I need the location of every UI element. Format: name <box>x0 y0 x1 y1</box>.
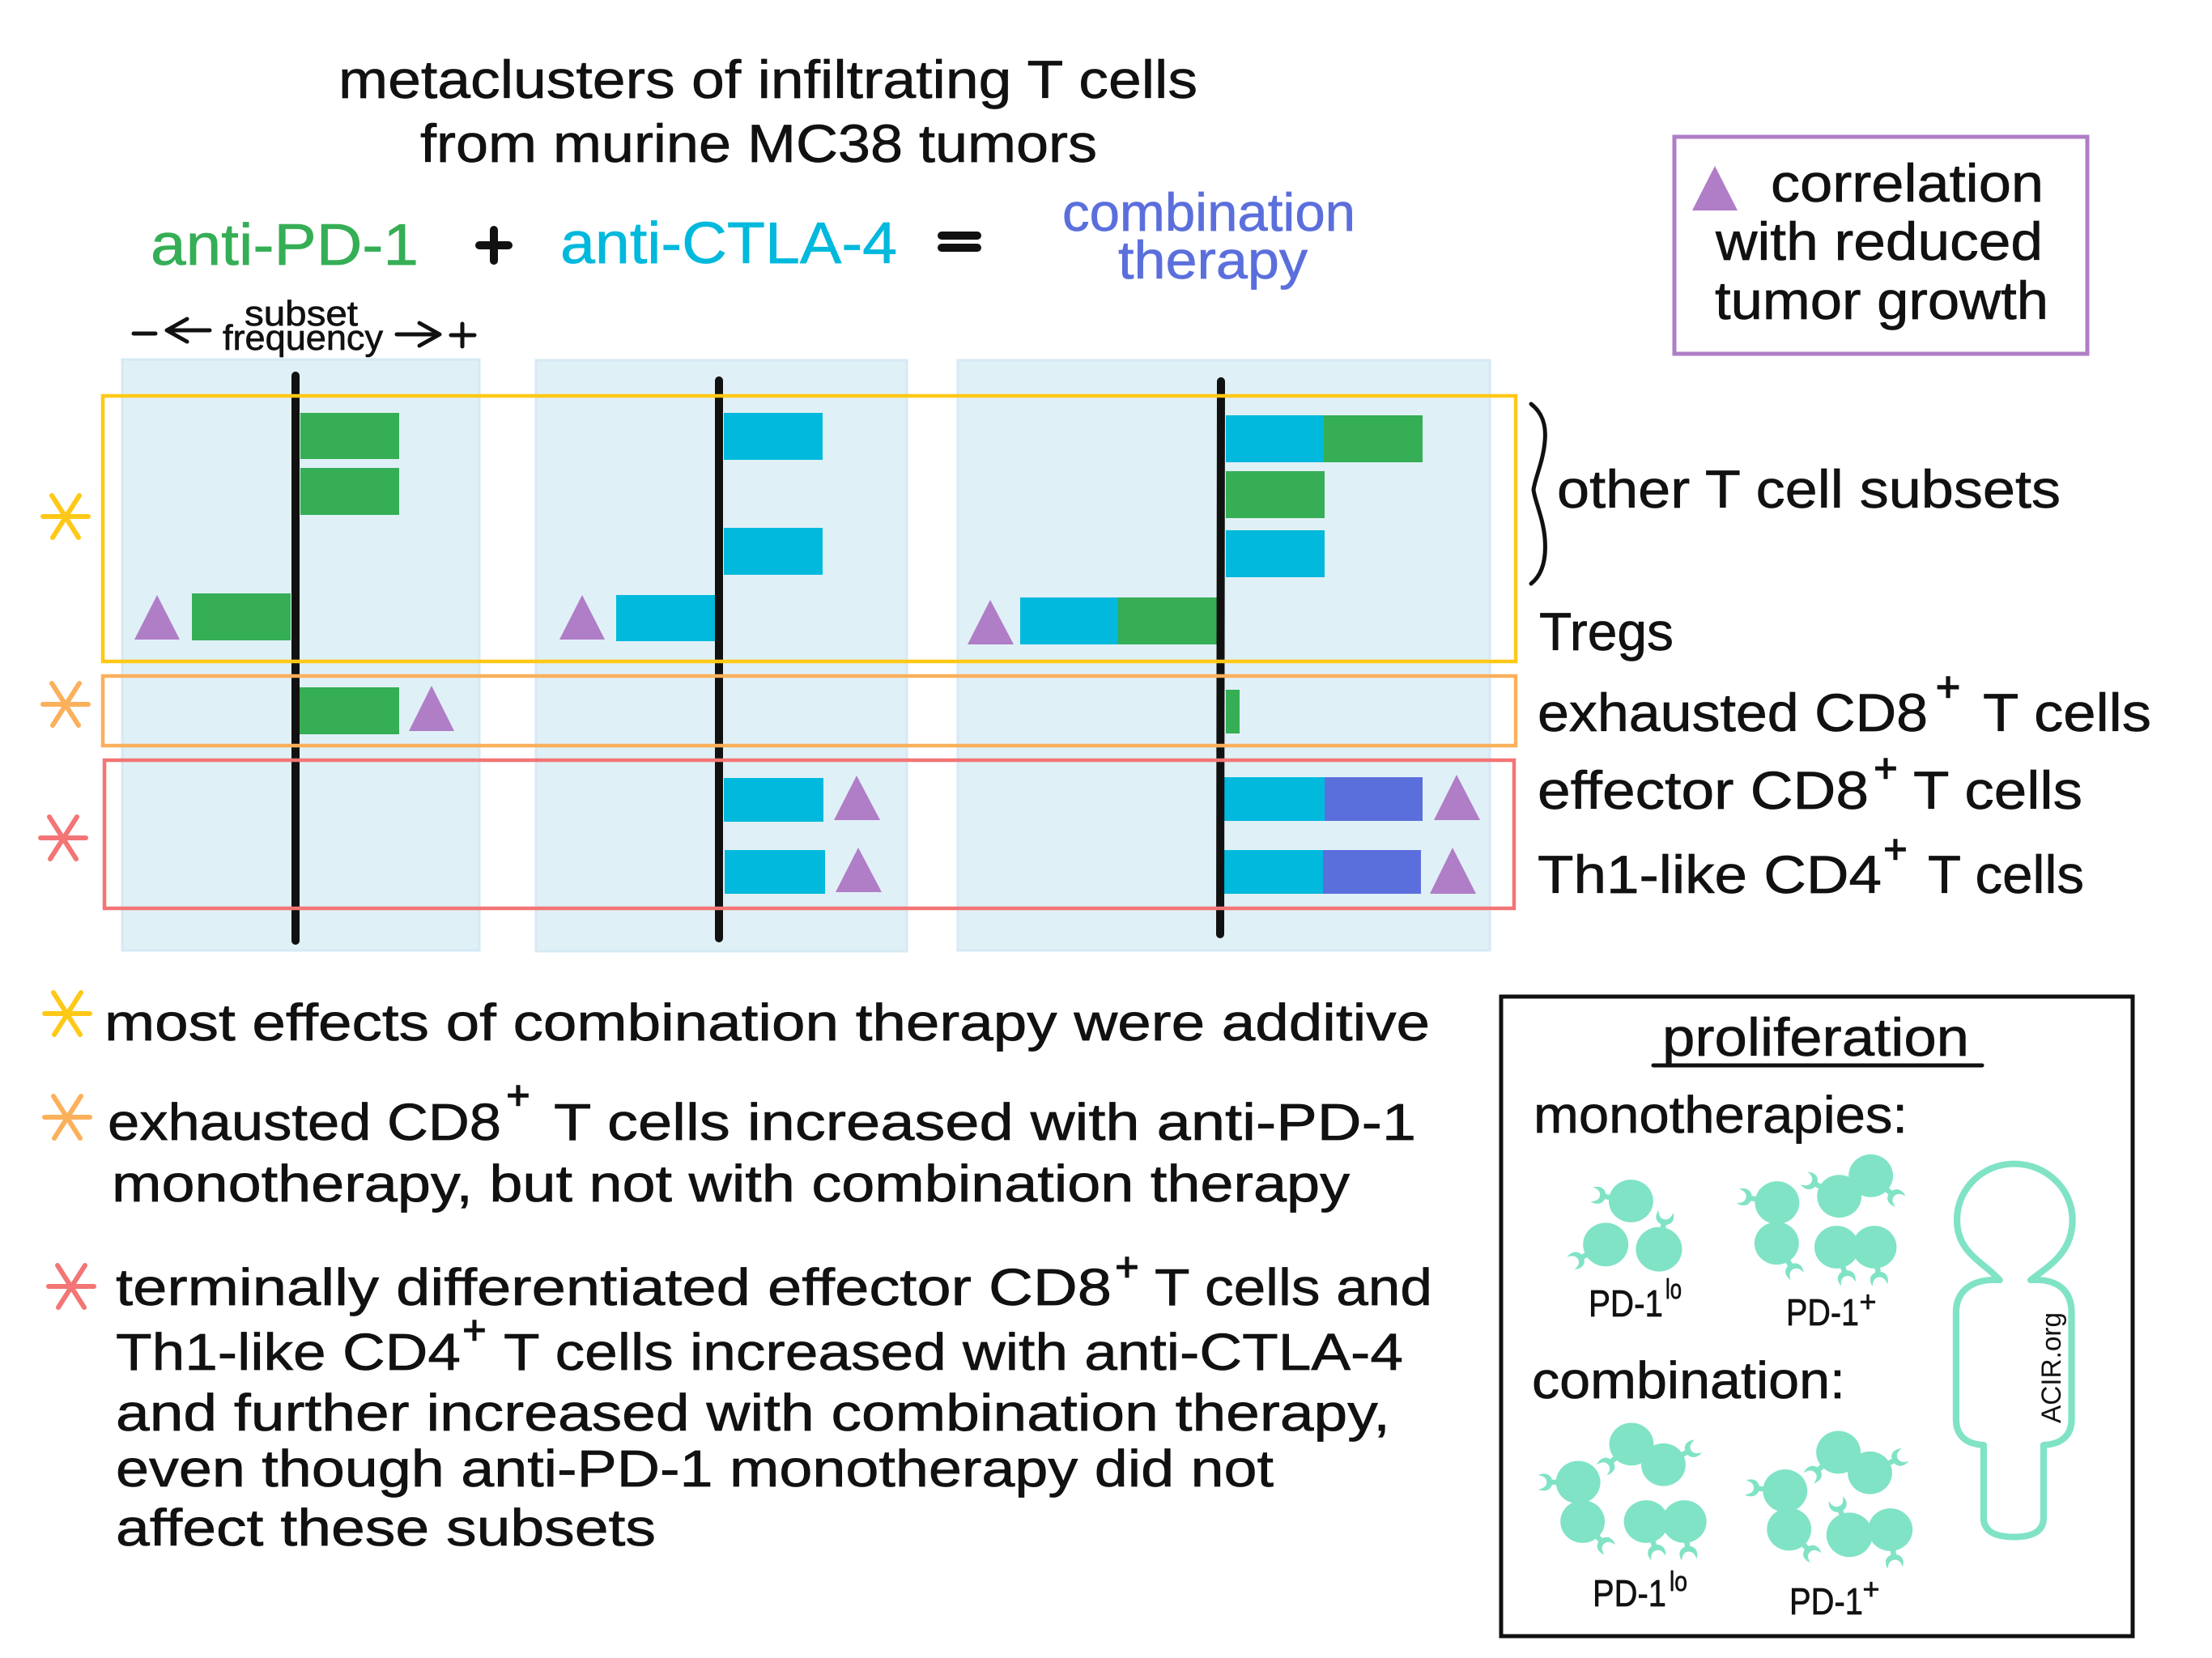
note: orange: T cells increased with anti-PD-1 <box>554 1093 1416 1151</box>
label: effector CD8+ T cells <box>1538 746 2082 820</box>
note: orange: exhausted CD8 <box>108 1093 501 1151</box>
title: metaclusters of infiltrating T cells <box>338 49 1197 109</box>
icon: legend triangle <box>1692 166 1738 210</box>
triangles: correlation markers <box>134 595 1480 894</box>
legend box <box>1674 137 2087 354</box>
note: red: T cells and <box>1155 1258 1432 1316</box>
label: effector CD8+ T cells: effector CD8 <box>1538 760 1869 820</box>
bars: anti-PD-1 <box>192 413 399 734</box>
heading: proliferation: proliferation <box>1662 1007 1969 1067</box>
note: red: affect these subsets <box>116 1499 656 1557</box>
label: monotherapy PD-1 lo: lo <box>1665 1274 1682 1305</box>
panel: proliferation <box>1501 997 2133 1636</box>
text: ACIR.org credit: ACIR.org <box>2036 1312 2067 1423</box>
note: red: even though anti-PD-1 monotherapy did not <box>116 1439 1274 1498</box>
axis lines <box>296 376 1221 941</box>
label: Tregs: Tregs <box>1539 602 1674 661</box>
panel: anti-CTLA-4 <box>536 360 907 951</box>
note: orange: monotherapy, but not with combination therapy <box>112 1154 1350 1213</box>
label: combination PD-1 lo: PD-1 <box>1593 1572 1666 1614</box>
combination therapy label: combination <box>1062 182 1355 242</box>
combination therapy label <box>1062 182 1355 290</box>
note: red: Th1-like CD4 <box>116 1323 461 1381</box>
equation: therapies <box>151 182 1355 290</box>
axis label: subset frequency: subset <box>245 294 358 334</box>
label: exhausted CD8+ T cells: T cells <box>1983 682 2151 742</box>
notes <box>45 993 1432 1557</box>
label: Th1-like CD4+ T cells <box>1538 827 2084 904</box>
bars: combination therapy <box>1020 415 1423 894</box>
note: red: T cells increased with anti-CTLA-4 <box>504 1323 1403 1381</box>
label: monotherapy PD-1 lo: PD-1 <box>1589 1282 1663 1324</box>
label: Th1-like CD4+ T cells: Th1-like CD4 <box>1538 844 1882 904</box>
note: red: + <box>1115 1244 1139 1290</box>
label: combination PD-1 +: PD-1 <box>1789 1580 1863 1622</box>
label: Th1-like CD4+ T cells: T cells <box>1928 844 2084 904</box>
icon: mouse body outline <box>1956 1164 2073 1537</box>
legend text: tumor growth <box>1715 270 2048 330</box>
label: monotherapy PD-1 +: + <box>1859 1285 1877 1318</box>
brace <box>1531 404 1545 584</box>
row labels <box>1538 459 2151 904</box>
label: effector CD8+ T cells: T cells <box>1913 760 2082 820</box>
cells: combination PD-1 lo <box>1538 1423 1707 1561</box>
plus sign <box>479 230 508 261</box>
note: yellow: most effects of combination therapy were additive <box>104 993 1430 1052</box>
anti-CTLA-4 label: anti-CTLA-4 <box>560 211 897 276</box>
label: combination PD-1 +: + <box>1862 1572 1880 1605</box>
heading: monotherapies: monotherapies: <box>1534 1086 1908 1144</box>
note: orange <box>45 1073 1416 1213</box>
panel: anti-PD-1 <box>122 359 479 950</box>
label: Th1-like CD4+ T cells: + <box>1883 827 1908 872</box>
box: orange group <box>103 676 1516 746</box>
asterisk: yellow <box>43 495 88 538</box>
cells: combination PD-1 positive <box>1745 1431 1912 1569</box>
title: from murine MC38 tumors <box>420 113 1097 173</box>
asterisk: red <box>40 817 86 859</box>
note: red: and further increased with combination therapy, <box>116 1384 1390 1442</box>
combination therapy label: therapy <box>1118 230 1308 290</box>
cells: monotherapy PD-1 positive <box>1736 1154 1907 1286</box>
label: other T cell subsets: other T cell subsets <box>1557 459 2061 519</box>
asterisk: orange <box>43 683 88 725</box>
note: red <box>49 1244 1432 1557</box>
note: red: + <box>462 1307 487 1353</box>
axis label: subset frequency: frequency <box>223 318 383 358</box>
label: exhausted CD8+ T cells <box>1538 664 2151 742</box>
panel: combination therapy <box>958 360 1490 950</box>
bars: anti-CTLA-4 <box>616 413 825 894</box>
box: yellow group <box>103 396 1516 661</box>
note: red: terminally differentiated effector CD8 <box>116 1258 1112 1316</box>
heading: combination: combination: <box>1532 1351 1845 1409</box>
label: monotherapy PD-1 +: PD-1 <box>1786 1291 1859 1333</box>
legend text: with reduced <box>1715 211 2043 271</box>
anti-PD-1 label: anti-PD-1 <box>151 213 419 278</box>
box: red group <box>104 760 1514 908</box>
legend text: correlation <box>1771 153 2044 213</box>
label: exhausted CD8+ T cells: + <box>1936 664 1960 711</box>
title <box>338 49 1197 173</box>
cells: monotherapy PD-1 lo <box>1567 1180 1682 1272</box>
equals sign <box>942 236 977 248</box>
label: combination PD-1 lo: lo <box>1670 1567 1687 1597</box>
legend text <box>1715 153 2048 330</box>
label: exhausted CD8+ T cells: exhausted CD8 <box>1538 682 1928 742</box>
label: effector CD8+ T cells: + <box>1874 746 1898 791</box>
note: orange: + <box>506 1073 530 1118</box>
axis label: subset frequency <box>134 294 474 358</box>
